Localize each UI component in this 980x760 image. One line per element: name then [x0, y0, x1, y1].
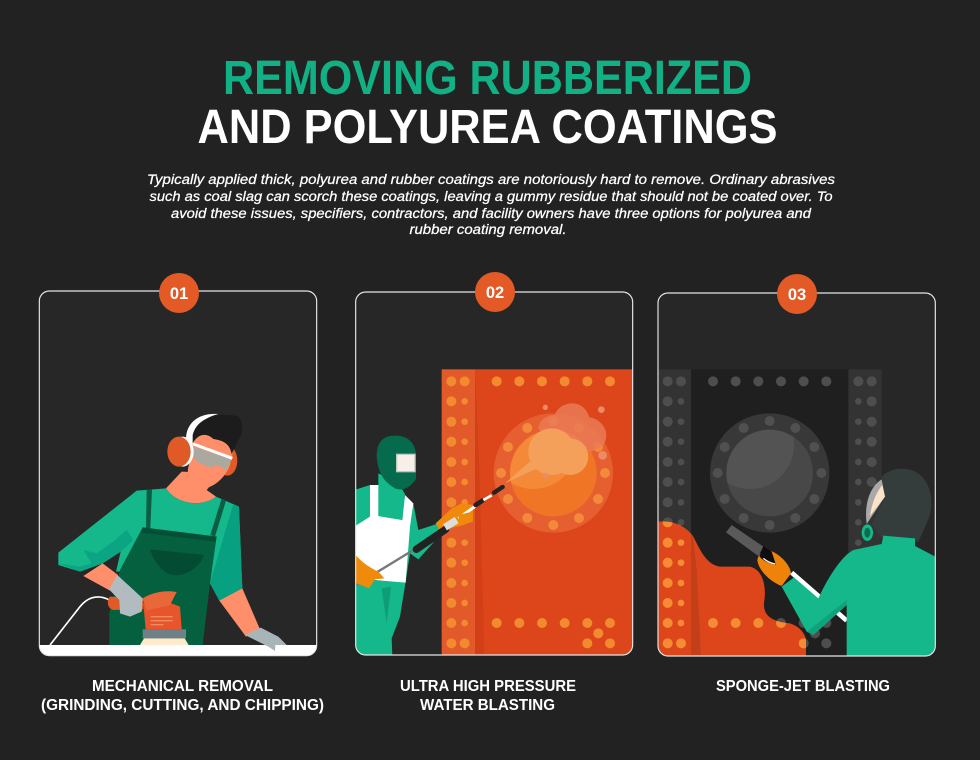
hatch highlight [510, 432, 566, 489]
illustration: worker with sander [37, 414, 320, 658]
left sleeve shade [58, 530, 133, 572]
title: AND POLYUREA COATINGS [198, 101, 778, 154]
lower glove [354, 553, 384, 588]
panel background [658, 293, 935, 656]
number badge 02: 02 [486, 284, 504, 302]
upper glove [436, 503, 473, 529]
goggle strap [193, 444, 232, 458]
number badge 03: 03 [788, 286, 806, 304]
caption 01: MECHANICAL REMOVAL [92, 678, 273, 695]
apron bib band [141, 527, 217, 542]
caption 02: WATER BLASTING [420, 697, 555, 714]
title [198, 52, 778, 154]
welding hood [377, 436, 416, 489]
panel frame [356, 292, 633, 655]
work surface [40, 645, 316, 656]
spray droplets [543, 405, 607, 479]
nozzle grip [759, 546, 776, 565]
wall rivets [446, 376, 615, 648]
hatch ring bolts [496, 416, 610, 530]
hatch ring [494, 413, 613, 533]
caption 02 [400, 678, 576, 714]
lance [356, 487, 503, 585]
shirt [58, 488, 242, 601]
face shield [866, 479, 885, 524]
panel background [356, 292, 633, 655]
wall [475, 369, 633, 656]
hatch ring bolts [713, 416, 826, 530]
dark wall [691, 369, 848, 656]
number badge 03 [777, 274, 817, 314]
sprayer hose [792, 573, 847, 621]
headband [186, 414, 218, 445]
worker legs [354, 580, 406, 656]
apron [109, 527, 217, 645]
apron pocket [150, 549, 204, 575]
sander handle [108, 597, 143, 610]
illustration: sponge-jet blasting [657, 369, 937, 657]
hatch centre [511, 451, 596, 516]
sander vent [151, 617, 173, 625]
panel frame [39, 291, 317, 656]
sander body [143, 603, 182, 629]
face [870, 485, 885, 516]
hood neck [378, 473, 405, 520]
caption 02: ULTRA HIGH PRESSURE [400, 678, 576, 695]
left glove [109, 575, 143, 617]
panel: mechanical removal [37, 291, 320, 658]
remaining orange coating [657, 376, 831, 657]
nozzle [726, 525, 763, 556]
right earmuff [224, 449, 238, 476]
left forearm [83, 563, 118, 591]
jacket [782, 536, 937, 656]
grey rivets [663, 376, 877, 648]
caption 01 [41, 678, 324, 714]
visor [397, 454, 415, 472]
water spray [505, 428, 588, 483]
earring [862, 524, 873, 541]
right forearm [219, 588, 260, 637]
panel background [39, 291, 317, 656]
white apron [354, 485, 413, 583]
hair [193, 415, 242, 454]
right sleeve shade [210, 504, 242, 601]
right glove [245, 628, 287, 651]
goggle lens [194, 447, 232, 470]
trouser fold [382, 587, 391, 623]
glove fingers [458, 512, 473, 526]
glove [757, 549, 791, 586]
intro paragraph: rubber coating removal. [410, 222, 566, 237]
wall left strip [442, 369, 475, 656]
intro paragraph: Typically applied thick, polyurea and rubber coatings are notoriously hard to remove. Ordinary abrasives [147, 172, 835, 187]
face [188, 433, 233, 489]
number badge 01 [159, 273, 199, 313]
caption 03: SPONGE-JET BLASTING [716, 678, 890, 695]
wall shade [475, 369, 484, 656]
illustration: water blasting orange wall [354, 369, 633, 656]
intro paragraph [147, 172, 835, 237]
number badge 02 [475, 272, 515, 312]
worker torso and arm [354, 485, 442, 582]
number badge 01: 01 [170, 285, 188, 303]
hood [872, 469, 931, 542]
neck [166, 472, 220, 503]
wall strips [658, 369, 882, 656]
panel frame [658, 293, 935, 656]
steam cloud [538, 403, 606, 452]
sleeve shade [807, 600, 847, 635]
caption 01: (GRINDING, CUTTING, AND CHIPPING) [41, 697, 324, 714]
sander plate [143, 629, 186, 638]
intro paragraph: avoid these issues, specifiers, contractors, and facility owners have three options for polyurea and [171, 206, 812, 221]
intro paragraph: such as coal slag can scorch these coatings, leaving a gummy residue that should not be coated over. To [150, 189, 833, 204]
hatch highlight [706, 401, 794, 489]
apron straps [146, 489, 226, 537]
panel: water blasting [354, 292, 633, 656]
panel: sponge-jet blasting [657, 293, 937, 657]
hatch centre [726, 430, 813, 516]
title: REMOVING RUBBERIZED [223, 52, 752, 105]
power cord [50, 597, 109, 645]
hatch ring [710, 413, 829, 533]
left earmuff [180, 436, 194, 467]
grip highlight [763, 558, 775, 564]
sander pad [140, 638, 189, 645]
sander top [143, 591, 177, 611]
